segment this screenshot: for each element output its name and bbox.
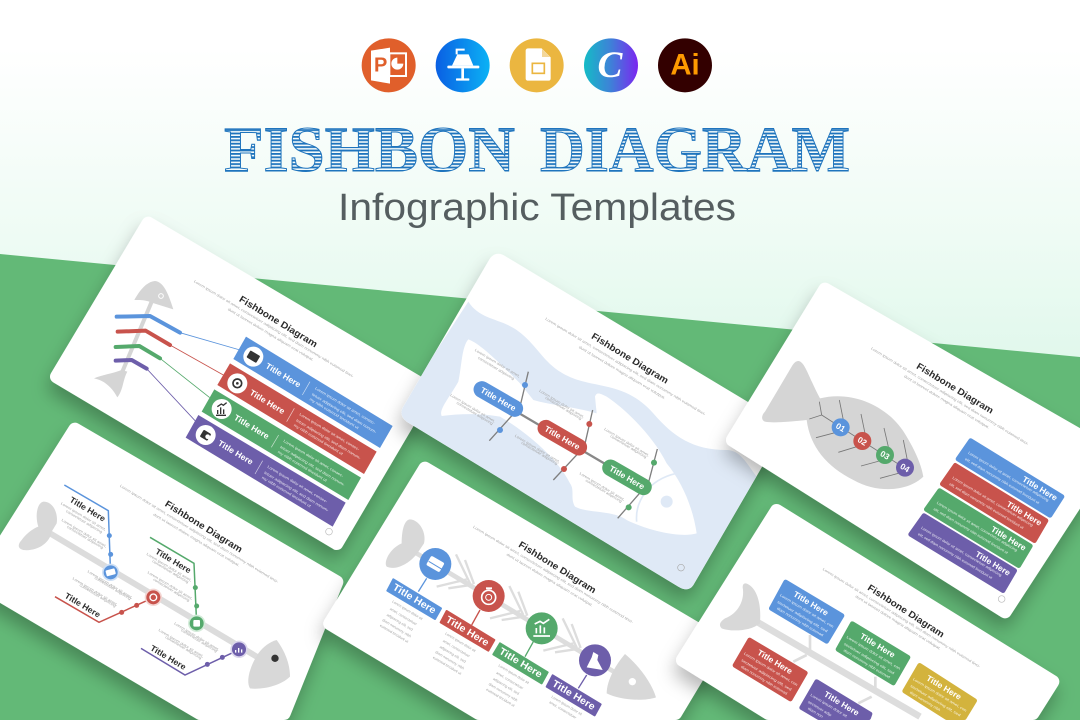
bone captions: consectetuer adipiscing	[520, 441, 558, 466]
box: yellow	[905, 665, 975, 718]
branch: purple: Lorem ipsum dolor sit amet,	[158, 628, 204, 658]
slide heading: dunt ut laoreet dolore magna aliquam erat volutpat.	[578, 345, 666, 400]
bone captions: consectetuer adipiscing	[585, 479, 623, 503]
slide heading	[544, 317, 707, 417]
panel: slide 5 fishbone with circles	[330, 468, 718, 720]
step: red	[432, 580, 505, 676]
branch: green: Title Here	[154, 546, 193, 575]
box: yellow: Lorem ipsum dolor sit amet, con	[912, 677, 967, 713]
slide heading: Fishbone Diagram	[237, 294, 319, 349]
branch: red	[55, 570, 162, 622]
bar: purple: my nibh euismod tincidunt ut	[261, 476, 312, 508]
spine and ribs	[417, 553, 617, 673]
box: green: sectetuer adipiscing elit, sed	[843, 642, 895, 675]
bar: purple: Title Here	[974, 549, 1013, 578]
bone captions: consectetuer adipiscing	[477, 356, 515, 381]
bar: purple: Title Here	[216, 438, 255, 467]
fish skeleton	[94, 281, 173, 397]
slide card	[330, 468, 718, 713]
step: blue: euismod tincidunt ut	[379, 624, 409, 644]
pill: green	[599, 456, 655, 498]
branch: green: Lorem ipsum dolor sit amet,	[147, 571, 193, 601]
background gradient	[0, 0, 1080, 400]
node 01: 01	[834, 421, 848, 434]
slide card	[733, 289, 1080, 612]
box: red: sectetuer adipiscing elit, sed	[740, 658, 792, 692]
box: green	[838, 624, 908, 683]
slide card	[57, 223, 428, 543]
step: blue	[379, 548, 451, 644]
box: purple: sectetuer adip	[807, 700, 832, 717]
branch: green: consectetuer adipiscing	[152, 578, 190, 602]
bar: blue	[233, 337, 393, 448]
box: red	[735, 640, 805, 699]
box: blue: sectetuer adipiscing elit, sed	[776, 600, 828, 633]
step: purple: Title Here	[550, 679, 597, 713]
node 04: 04	[898, 461, 912, 475]
branch: red: consectetuer adipiscing	[94, 576, 132, 601]
box: red: Title Here	[756, 647, 795, 676]
page number	[998, 596, 1005, 602]
spine	[497, 400, 627, 477]
bar: red: my nibh euismod tincidunt ut	[293, 423, 344, 456]
page number	[326, 528, 332, 535]
slide heading: Fishbone Diagram	[517, 539, 598, 595]
panel: slide 1 horizontal bars	[57, 223, 428, 543]
bone captions: Lorem ipsum dolor sit amet,	[449, 393, 496, 423]
step: blue: Title Here	[390, 582, 438, 617]
bar: green: Title Here	[232, 412, 271, 441]
fish tail	[386, 519, 425, 568]
icon: Keynote	[436, 38, 490, 92]
fish tail	[720, 583, 760, 630]
dots	[497, 382, 657, 510]
bar: green: Lorem ipsum dolor sit amet, consec-	[283, 439, 345, 479]
slide card	[401, 254, 786, 589]
bar: green	[202, 389, 361, 500]
slide heading: dunt ut laoreet dolore magna aliquam erat volutpat.	[903, 374, 990, 430]
bone captions: consectetuer adipiscing	[456, 401, 494, 426]
bones	[489, 372, 657, 518]
branch: purple: consectetuer adipiscing	[164, 635, 202, 660]
bar: red: elit, sed diam nonummy nibh euismod tincidunt ut	[948, 482, 1024, 530]
bone captions: Lorem ipsum dolor sit amet,	[474, 348, 521, 378]
bar: red	[942, 465, 1046, 541]
bar: green: Lorem ipsum dolor sit amet, consectetuer adipiscing	[936, 501, 1018, 552]
panel: slide 2 blue fish	[393, 254, 786, 597]
bar: blue: my nibh euismod tincidunt ut	[309, 397, 359, 430]
box: blue: Lorem ipsum dolor sit amet, con	[779, 593, 834, 629]
branch: green	[146, 537, 205, 632]
branch: blue: Lorem ipsum dolor sit amet,	[61, 518, 107, 548]
step: green: diam nonummy nibh	[488, 682, 518, 703]
step: red: euismod tincidunt ut	[432, 656, 462, 676]
bar: blue: Title Here	[264, 361, 303, 390]
bone captions: Lorem ipsum dolor sit amet,	[514, 434, 561, 464]
pill: red: Title Here	[543, 424, 582, 452]
step: green: adipiscing elit, sed	[492, 677, 520, 696]
bar: purple: Lorem ipsum dolor sit amet, consectetuer adipiscing	[920, 526, 1002, 577]
slide heading: dunt ut laoreet dolore magna aliquam erat volutpat.	[506, 553, 594, 607]
node 04	[896, 459, 914, 477]
bar: red: Lorem ipsum dolor sit amet, consectetuer adipiscing	[952, 476, 1034, 527]
bone captions: Lorem ipsum dolor sit amet,	[579, 472, 625, 502]
bar: red: Lorem ipsum dolor sit amet, consec-	[299, 412, 361, 452]
step: blue: Lorem ipsum dolor sit	[391, 600, 423, 621]
bar: red	[217, 363, 377, 474]
bar: blue	[958, 441, 1062, 515]
branch: blue: Title Here	[68, 494, 108, 524]
bar: blue: elit, sed diam nonummy nibh euismod tincidunt ut	[964, 457, 1040, 505]
slide heading: Lorem ipsum dolor sit amet, consectetuer adipiscing elit, sed diam nonummy nibh euismod tinci-	[193, 279, 355, 379]
branch: red: consectetuer adipiscing	[79, 583, 117, 608]
step: purple	[547, 644, 611, 720]
bone captions: Lorem ipsum dolor sit amet,	[538, 389, 585, 419]
branch: purple: consectetuer adipiscing	[180, 628, 218, 653]
step: red: diam nonummy nibh	[435, 650, 465, 671]
pill: red	[534, 417, 590, 459]
bar: green: Title Here	[989, 524, 1028, 553]
bar: red: Title Here	[248, 387, 287, 416]
slide heading: Fishbone Diagram	[590, 331, 670, 386]
slide heading: Fishbone Diagram	[866, 582, 946, 640]
icon: Canva: C	[598, 45, 624, 86]
spine	[50, 533, 257, 657]
icon: Google Slides	[510, 38, 564, 92]
icon: Illustrator	[658, 38, 712, 92]
icon: Illustrator: Ai	[670, 48, 700, 81]
slide heading: Lorem ipsum dolor sit amet, consectetuer adipiscing elit, sed diam nonummy nibh euismod tinci-	[472, 525, 635, 625]
box: green: Lorem ipsum dolor sit amet, con	[846, 635, 901, 671]
bar: red: tetuer adipiscing elit, sed diam nonum-	[295, 418, 362, 461]
step: red: Title Here	[443, 615, 491, 649]
bar: blue: tetuer adipiscing elit, sed diam nonum-	[311, 392, 378, 435]
branch: purple	[141, 622, 248, 675]
page number	[678, 564, 684, 571]
node 02	[853, 432, 871, 450]
branch: green: consectetuer adipiscing	[151, 559, 189, 584]
step: blue: amet, consectetuer	[389, 607, 418, 627]
slide card	[0, 429, 337, 713]
step: red: amet, consectetuer	[442, 639, 471, 659]
node 03: 03	[878, 448, 892, 462]
bar: red: Title Here	[1005, 499, 1044, 528]
step: green: amet, consectetuer	[495, 671, 525, 691]
branch: blue	[60, 485, 119, 581]
box: purple: diam non	[807, 707, 824, 719]
slide heading: Fishbone Diagram	[915, 361, 995, 416]
bones	[809, 400, 907, 478]
pill: blue	[470, 378, 526, 420]
step: red: adipiscing elit, sed	[439, 645, 467, 664]
branch: purple: Lorem ipsum dolor sit amet,	[173, 622, 220, 652]
title: FISHBON	[224, 114, 515, 186]
step: purple: Lorem ipsum dolor sit	[551, 695, 583, 716]
slide heading: Lorem ipsum dolor sit amet, consectetuer adipiscing elit, sed diam nonummy nibh euismod tinci-	[544, 317, 707, 417]
icon: PowerPoint: P	[374, 55, 387, 77]
branch: red: Title Here	[63, 590, 103, 620]
slide heading: Lorem ipsum dolor sit amet, consectetuer adipiscing elit, sed diam nonummy nibh euismod tinci-	[870, 347, 1030, 447]
box: red: diam nonummy nibh euismod	[740, 665, 788, 696]
step: green	[485, 612, 558, 708]
box: purple	[802, 682, 870, 719]
pill: blue: Title Here	[479, 385, 518, 413]
bar: purple: Lorem ipsum dolor sit amet, consec-	[267, 465, 329, 504]
step: green: euismod tincidunt ut	[485, 688, 515, 708]
branch: red: Lorem ipsum dolor sit amet,	[72, 577, 118, 607]
step: red: Lorem ipsum dolor sit	[444, 632, 476, 653]
bone captions: consectetuer adipiscing	[544, 396, 582, 421]
bar: blue: Lorem ipsum dolor sit amet, consec-	[314, 386, 377, 426]
bar: green: tetuer adipiscing elit, sed diam nonum-	[279, 445, 346, 487]
fish head	[607, 654, 656, 700]
node 02: 02	[856, 434, 869, 448]
slide heading: Lorem ipsum dolor sit amet, consectetuer adipiscing elit, sed diam nonummy nibh euismod tinci-	[119, 484, 280, 585]
step: purple: amet, consectetuer	[548, 700, 578, 720]
bar: purple: tetuer adipiscing elit, sed diam nonum-	[263, 471, 330, 513]
slide heading: Fishbone Diagram	[163, 499, 244, 555]
bone captions: consectetuer adipiscing	[609, 434, 647, 459]
bar: green: my nibh euismod tincidunt ut	[277, 450, 328, 483]
slide heading: dunt ut laoreet dolore magna aliquam erat volutpat.	[152, 513, 240, 567]
box: yellow: sectetuer adipiscing elit, sed	[909, 684, 961, 717]
branch: blue: consectetuer adipiscing	[65, 509, 103, 534]
branch: green: Lorem ipsum dolor sit amet,	[146, 552, 192, 582]
panel: slide 6 fishbone with boxes	[683, 511, 1053, 719]
slide heading: dunt ut laoreet dolore magna aliquam erat volutpat.	[227, 307, 314, 362]
pill: green: Title Here	[607, 463, 647, 492]
bar: purple	[186, 415, 346, 527]
node 01	[832, 418, 850, 436]
branch: purple: Title Here	[149, 643, 188, 672]
box: blue	[771, 582, 842, 641]
green diagonal band	[0, 254, 1080, 720]
coloured ribs	[116, 316, 240, 422]
box: green: Title Here	[858, 631, 897, 660]
box: purple: Lorem ipsum dolor sit	[810, 693, 848, 718]
panel: slide 4 fishbone with branches	[0, 429, 337, 713]
subtitle: Infographic Templates	[338, 187, 736, 229]
icon: PowerPoint	[362, 38, 416, 92]
branch: red: Lorem ipsum dolor sit amet,	[87, 570, 133, 600]
bar: blue: Lorem ipsum dolor sit amet, consectetuer adipiscing	[967, 451, 1049, 502]
box: yellow: Title Here	[925, 673, 964, 702]
box: purple: Title Here	[822, 689, 861, 718]
node 03	[876, 446, 894, 464]
step: blue: adipiscing elit, sed	[386, 613, 414, 632]
app icons row	[362, 38, 712, 92]
slide heading: Lorem ipsum dolor sit amet, consectetuer adipiscing elit, sed diam nonummy nibh euismod tinci-	[822, 567, 982, 669]
bar: blue: Title Here	[1021, 474, 1060, 503]
fish head	[248, 640, 290, 689]
bar: purple: elit, sed diam nonummy nibh euismod tincidunt ut	[917, 532, 993, 580]
box: blue: Title Here	[792, 589, 831, 618]
fish silhouette	[762, 361, 923, 489]
box: red: Lorem ipsum dolor sit amet, con	[743, 652, 798, 687]
title: DIAGRAM	[540, 114, 850, 186]
box: blue: diam nonummy nibh euismod	[776, 607, 824, 637]
box: green: diam nonummy nibh euismod	[843, 649, 891, 679]
bone captions: Lorem ipsum dolor sit amet,	[603, 427, 650, 457]
bar: green	[926, 491, 1030, 566]
branch: blue: consectetuer adipiscing	[66, 525, 104, 550]
branch: blue: Lorem ipsum dolor sit amet,	[60, 502, 107, 532]
slide heading	[472, 525, 635, 625]
slide heading: dunt ut laoreet dolore magna aliquam erat volutpat.	[855, 594, 941, 651]
step: green: Lorem ipsum dolor sit	[498, 664, 530, 685]
bar: green: elit, sed diam nonummy nibh euismod tincidunt ut	[933, 507, 1009, 555]
step: green: Title Here	[497, 646, 544, 681]
spine and ribs	[757, 622, 920, 717]
fish tail	[19, 502, 57, 550]
step: blue: diam nonummy nibh	[382, 618, 412, 639]
fish background	[393, 302, 757, 597]
bone captions	[449, 348, 650, 503]
slide card	[683, 511, 1053, 713]
bar: purple	[911, 516, 1015, 591]
icon: Canva	[584, 38, 638, 92]
box: yellow: diam nonummy nibh	[909, 691, 941, 712]
panel: slide 3 numbered fish	[733, 289, 1080, 612]
title	[224, 114, 850, 186]
